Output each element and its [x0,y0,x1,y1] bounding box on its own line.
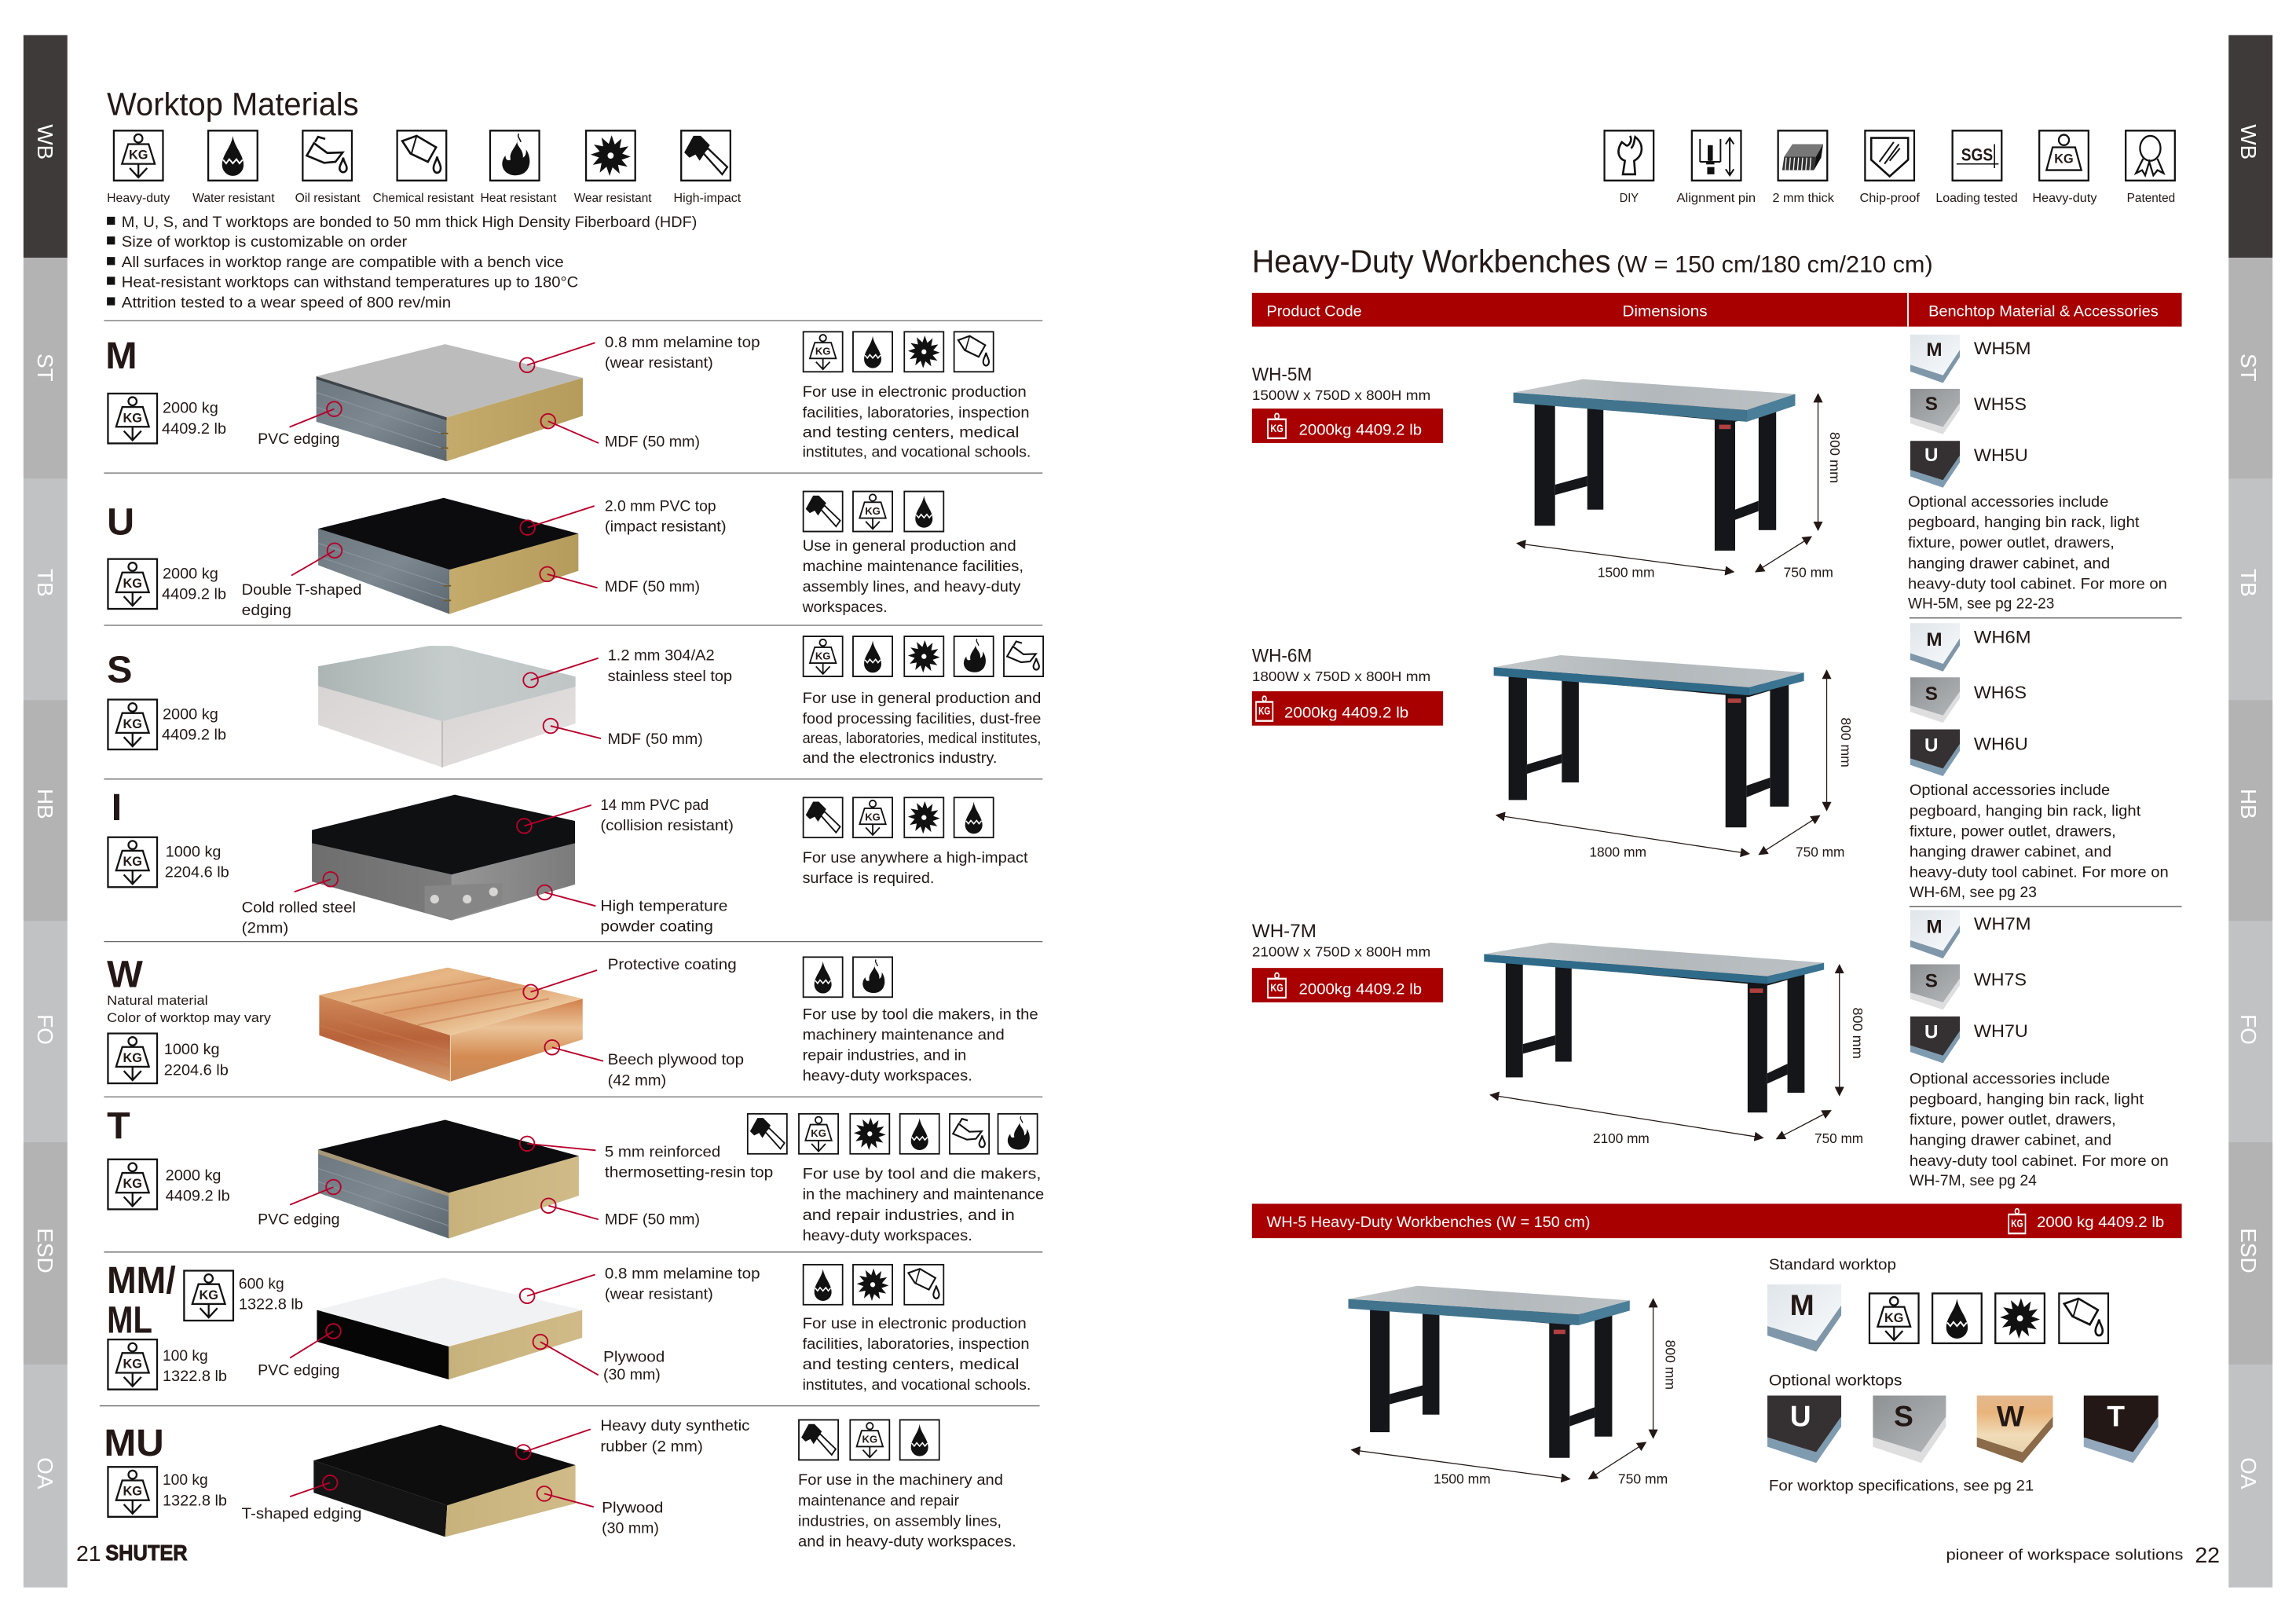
footer: left page: SHUTER [105,1541,188,1565]
title: Worktop Materials: Worktop Materials [107,86,359,122]
legend: worktop property icons: Heat resistant [480,192,557,205]
optional worktops: U [1790,1400,1811,1433]
bench drawing: 2100 mm: 750 mm [1814,1130,1863,1146]
panel: S worktop [107,636,1043,768]
feature icons row [1605,130,2175,205]
worktop options: U [1924,735,1939,756]
load rating: M: 2000 kg [163,400,218,417]
heading: MM/ML [107,1259,176,1341]
description: machinery maintenance and [803,1027,1005,1044]
labels: 2.0 mm PVC top [605,498,716,515]
feature icons row: Chip-proof [1859,192,1921,205]
accessories note [1910,1070,2169,1189]
feature icons row: Alignment pin [1676,192,1756,205]
panel: MU worktop [104,1417,1016,1551]
labels: 1.2 mm 304/A2 [608,647,715,665]
labels: T-shaped edging [242,1505,361,1522]
footer: right page: pioneer of workspace solutions [1946,1546,2184,1563]
feature icons row: Heavy-duty [2032,192,2097,205]
labels: Cold rolled steel [242,899,356,916]
worktop options: WH7U [1974,1021,2028,1041]
description: institutes, and vocational schools. [803,444,1031,461]
bullet list: worktop notes: All surfaces in worktop range are compatible with a bench vice [122,254,564,271]
optional worktops: W [1997,1400,2025,1433]
description: For use in electronic production [803,1315,1027,1332]
section tabs: left: ST [33,354,57,382]
optional worktops: T [2107,1400,2125,1433]
load rating: W [108,1034,229,1083]
callouts [290,1429,594,1507]
optional worktops: Optional worktops [1769,1372,1902,1389]
footer: left page [76,1541,188,1566]
accessories note: hanging drawer cabinet, and [1910,1132,2111,1149]
load rating: M: 4409.2 lb [162,420,226,438]
description: surface is required. [803,870,934,887]
worktop block: PVC pad on steel [312,795,575,921]
accessories note: fixture, power outlet, drawers, [1910,822,2116,840]
labels: edging [242,602,291,619]
description [803,1166,1044,1244]
accessories note: heavy-duty tool cabinet. For more on [1910,864,2169,881]
labels: MDF (50 mm) [605,578,700,595]
heading: MM/ML: ML [107,1299,152,1341]
bullet list: worktop notes [107,214,697,311]
footer: left page: 21 [76,1541,101,1566]
worktop block: white melamine [317,1277,582,1379]
red title bar: WH-5 Heavy-Duty Workbenches (W = 150 cm) [1266,1214,1590,1231]
feature icons row: DIY [1620,192,1639,205]
bench drawing: 1500 mm: 750 mm [1784,564,1833,580]
property icons [799,1420,939,1460]
description: institutes, and vocational schools. [803,1376,1031,1394]
load badge [1252,968,1443,1002]
heading: MM/ML: MM/ [107,1259,176,1302]
description: and the electronics industry. [803,749,997,767]
table header: Benchtop Material & Accessories [1928,303,2159,321]
product code and dimensions: 2100W x 750D x 800H mm [1252,943,1430,959]
accessories note: fixture, power outlet, drawers, [1908,534,2115,551]
labels: stainless steel top [608,668,732,685]
accessories note: Optional accessories include [1910,1070,2110,1087]
panel: W worktop [107,953,1038,1089]
callouts [291,506,598,588]
section tabs: left: OA [33,1457,57,1489]
worktop block: beech wood [319,968,583,1082]
load rating: W: 1000 kg [164,1041,220,1058]
panel: T worktop [107,1105,1044,1244]
bench drawing: 1800 mm: 750 mm [1796,844,1844,860]
description: maintenance and repair [798,1492,960,1509]
product code and dimensions: WH-6M [1252,646,1312,667]
worktop options: S [1925,394,1938,415]
description: For use in electronic production [803,383,1027,401]
worktop block: synthetic rubber [313,1425,576,1537]
section tabs: right: HB [2236,789,2261,819]
heading: I: I [112,786,122,829]
description: and testing centers, medical [803,423,1019,441]
labels [608,956,744,1089]
description [803,1315,1031,1394]
standard worktop: Standard worktop [1769,1256,1896,1273]
optional worktops: For worktop specifications, see pg 21 [1769,1478,2034,1495]
title: Heavy-Duty Workbenches: Heavy-Duty Workbenches [1252,244,1611,280]
bench drawing: 2100 mm: 2100 mm [1593,1130,1650,1146]
labels: 14 mm PVC pad [600,797,709,814]
description [803,690,1042,767]
description: assembly lines, and heavy-duty [803,578,1021,595]
accessories note: pegboard, hanging bin rack, light [1908,514,2140,531]
load rating: U: 4409.2 lb [162,585,226,603]
heading: S: S [107,649,132,691]
labels: Beech plywood top [608,1051,744,1068]
worktop options: WH5S [1974,394,2027,414]
worktop options: WH7S [1974,970,2027,990]
worktop options: S [1925,970,1938,991]
labels: thermosetting-resin top [605,1164,773,1182]
accessories note: pegboard, hanging bin rack, light [1910,802,2141,819]
standard worktop: M [1790,1288,1814,1321]
load rating: MM: 1322.8 lb [239,1296,303,1313]
description: Use in general production and [803,537,1016,555]
description: repair industries, and in [803,1047,966,1064]
section tabs: right: ST [2236,354,2261,382]
worktop options: WH5M [1974,339,2031,358]
description: For use anywhere a high-impact [803,849,1028,866]
callouts [290,343,599,443]
load badge [1252,691,1443,726]
description: workspaces. [802,599,888,616]
load rating: S [108,700,226,749]
load rating: MU: 1322.8 lb [163,1492,227,1509]
accessories note: fixture, power outlet, drawers, [1910,1112,2116,1129]
worktop options: U [1924,445,1939,466]
load rating: M [108,394,226,443]
callouts [290,1275,599,1375]
note: natural material: Natural material [107,993,208,1008]
section tabs: left [24,35,68,1588]
load rating: MM [184,1271,303,1321]
description: For use in general production and [803,690,1041,707]
note: natural material: Color of worktop may vary [107,1010,272,1025]
accessories note: WH-5M, see pg 22-23 [1908,595,2055,613]
red title bar: 2000 kg 4409.2 lb [2037,1214,2164,1231]
bench drawing: 2100 mm [1484,943,1866,1146]
table header: Dimensions [1622,303,1708,321]
property icons [804,492,943,532]
title: Heavy-Duty Workbenches [1252,244,1933,280]
load badge [1252,408,1443,443]
labels [258,1265,760,1383]
property icons [804,636,1043,676]
labels: Plywood [602,1500,663,1517]
load rating: U: 2000 kg [163,565,218,582]
description: in the machinery and maintenance [803,1186,1044,1204]
section tabs: right [2228,35,2272,1588]
load rating: W: 2204.6 lb [164,1061,229,1079]
load badge: 2000kg 4409.2 lb [1299,422,1422,439]
labels: 0.8 mm melamine top [605,1265,760,1282]
labels: powder coating [600,918,713,936]
labels: (42 mm) [608,1072,666,1089]
load rating: T: 2000 kg [166,1167,222,1184]
load rating: S: 2000 kg [163,705,218,723]
feature icons row: Loading tested [1935,192,2018,205]
legend: worktop property icons: Heavy-duty [107,192,170,205]
panel: WH-5M [1252,335,2167,613]
labels: rubber (2 mm) [600,1438,703,1455]
accessories note: hanging drawer cabinet, and [1908,555,2110,572]
load rating: MU [108,1467,227,1517]
load rating: ML [108,1339,227,1390]
labels [258,334,760,451]
accessories note: hanging drawer cabinet, and [1910,844,2111,861]
worktop options: WH6M [1974,627,2031,647]
title: Heavy-Duty Workbenches: (W = 150 cm/180 cm/210 cm) [1617,252,1933,278]
description: industries, on assembly lines, [798,1512,1002,1530]
labels: PVC edging [258,1211,340,1228]
description [803,1006,1038,1085]
legend: worktop property icons: Oil resistant [295,192,361,205]
description: facilities, laboratories, inspection [803,1335,1030,1353]
product code and dimensions: WH-5M [1252,365,1312,386]
description: heavy-duty workspaces. [803,1227,972,1244]
legend: worktop property icons: High-impact [674,192,742,205]
load rating: T: 4409.2 lb [166,1188,230,1205]
panel: MM/ML worktop [107,1259,1031,1394]
bench drawing: 2100 mm: 800 mm [1850,1008,1866,1059]
description: food processing facilities, dust-free [803,710,1042,727]
panel: WH-5 heavy-duty workbenches [1252,1204,2182,1495]
labels [258,1144,773,1228]
description: and repair industries, and in [803,1207,1015,1224]
bench drawing: 1500 mm: 750 mm [1618,1471,1668,1486]
worktop options: WH6S [1974,683,2027,702]
description: and in heavy-duty workspaces. [798,1533,1016,1551]
worktop block: stainless steel [318,646,576,768]
section tabs: right: FO [2236,1014,2261,1045]
worktop options: WH6U [1974,734,2028,753]
panel: U worktop [107,492,1023,619]
footer: right page: 22 [2195,1543,2220,1567]
load rating: ML: 100 kg [163,1347,208,1365]
section tabs: left: HB [33,789,57,819]
labels: Protective coating [608,956,737,973]
section tabs: left: FO [33,1014,57,1045]
bench drawing: 1500 mm: 800 mm [1662,1340,1678,1390]
callouts [290,1137,599,1219]
description: For use by tool die makers, in the [803,1006,1038,1023]
worktop options: M [1926,916,1943,937]
load rating: I: 1000 kg [166,844,222,861]
callouts [523,658,601,738]
description: machine maintenance facilities, [803,558,1023,575]
heading: M: M [105,335,137,377]
accessories note: heavy-duty tool cabinet. For more on [1908,575,2167,592]
accessories note: Optional accessories include [1908,493,2108,511]
property icons [748,1114,1038,1154]
labels: MDF (50 mm) [608,731,703,748]
legend: worktop property icons: Chemical resistant [372,192,474,205]
load rating: S: 4409.2 lb [162,726,226,743]
standard worktop [1767,1256,2108,1352]
heading: U: U [107,500,134,543]
labels: (2mm) [242,919,288,936]
description: For use in the machinery and [798,1471,1003,1489]
description: For use by tool and die makers, [803,1166,1041,1183]
labels: (30 mm) [603,1366,661,1383]
worktop options: WH7M [1974,914,2031,934]
panel: I worktop [108,786,1028,936]
bullet list: worktop notes: M, U, S, and T worktops are bonded to 50 mm thick High Density Fiberboard (HDF) [122,214,697,231]
heading: W: W [107,953,143,995]
table header: Product Code [1266,303,1362,321]
section tabs: right: WB [2236,124,2261,159]
bench drawing: 1500 mm: 800 mm [1827,432,1843,483]
section tabs: right: OA [2236,1457,2261,1489]
section tabs: right: ESD [2236,1228,2261,1273]
worktop block: PVC [318,498,578,614]
worktop options [1910,335,2031,488]
panel: WH-6M [1252,623,2169,901]
callouts [295,805,595,906]
bench drawing: 1800 mm: 1800 mm [1589,844,1646,860]
property icons [804,1265,943,1305]
description: areas, laboratories, medical institutes, [803,730,1041,747]
accessories note [1910,782,2169,901]
optional worktops: S [1894,1400,1913,1433]
property icons [804,957,892,997]
description: heavy-duty workspaces. [803,1068,972,1085]
description: facilities, laboratories, inspection [803,404,1030,421]
section tabs: left: TB [33,569,57,597]
legend: worktop property icons: Water resistant [192,192,275,205]
labels: (impact resistant) [605,518,727,536]
load rating: U [108,559,226,609]
callouts [523,970,603,1061]
labels: Heavy duty synthetic [600,1417,750,1434]
load rating: T [108,1160,230,1209]
footer: right page [1946,1543,2220,1567]
worktop options: M [1926,339,1943,361]
feature icons row: 2 mm thick [1773,192,1834,205]
labels: 5 mm reinforced [605,1144,720,1161]
product code and dimensions: 1500W x 750D x 800H mm [1252,387,1430,403]
accessories note: WH-7M, see pg 24 [1910,1172,2037,1189]
worktop block: melamine [317,344,583,461]
product code and dimensions [1252,646,1430,684]
load badge: 2000kg 4409.2 lb [1284,704,1408,721]
panel: WH-7M [1252,910,2169,1189]
labels: Double T-shaped [242,581,361,599]
product code and dimensions [1252,921,1430,959]
bench drawing: 1500 mm: 1500 mm [1434,1471,1491,1486]
labels [242,498,727,619]
panel: M worktop [105,332,1031,461]
property icons [804,332,994,372]
worktop options: WH5U [1974,445,2028,465]
bullet list: worktop notes: Size of worktop is customizable on order [122,233,408,251]
labels: PVC edging [258,1361,340,1379]
labels: (wear resistant) [605,354,713,372]
description [798,1471,1016,1551]
product code and dimensions: 1800W x 750D x 800H mm [1252,669,1430,684]
accessories note: pegboard, hanging bin rack, light [1910,1091,2144,1108]
load rating: I [108,837,229,887]
labels: (30 mm) [602,1520,659,1537]
heading: T: T [107,1105,130,1147]
load badge: 2000kg 4409.2 lb [1299,981,1422,998]
property icons [804,797,994,837]
labels: Plywood [603,1349,665,1366]
worktop options: S [1925,683,1938,705]
bullet list: worktop notes: Heat-resistant worktops can withstand temperatures up to 180°C [122,273,578,291]
accessories note [1908,493,2167,613]
table header [1252,293,2182,327]
labels: High temperature [600,897,728,914]
worktop options [1910,623,2031,776]
load rating: MU: 100 kg [163,1471,208,1489]
labels: (wear resistant) [605,1285,713,1302]
bench drawing: 1800 mm [1494,655,1854,860]
red title bar [1252,1204,2182,1238]
description [803,383,1031,461]
section tabs: left: WB [33,124,57,159]
labels: 0.8 mm melamine top [605,334,760,351]
heading: MU: MU [104,1422,164,1464]
labels: MDF (50 mm) [605,1211,700,1228]
product code and dimensions [1252,365,1430,403]
labels [242,1417,750,1537]
bench drawing: 1800 mm: 800 mm [1838,717,1854,768]
accessories note: Optional accessories include [1910,782,2110,799]
labels [608,647,732,748]
labels: PVC edging [258,430,340,448]
description [803,849,1028,887]
load rating: I: 2204.6 lb [165,864,229,881]
load rating: ML: 1322.8 lb [163,1368,227,1385]
description [802,537,1023,616]
worktop options: M [1926,629,1943,650]
feature icons row: Patented [2127,192,2175,205]
labels [242,797,734,936]
worktop options [1910,910,2031,1063]
bullet list: worktop notes: Attrition tested to a wear speed of 800 rev/min [122,294,451,311]
product code and dimensions: WH-7M [1252,921,1316,942]
legend: worktop property icons: Wear resistant [574,192,652,205]
accessories note: heavy-duty tool cabinet. For more on [1910,1152,2169,1170]
note: natural material [107,993,272,1025]
labels: MDF (50 mm) [605,434,700,451]
worktop options: U [1924,1022,1939,1043]
section tabs: left: ESD [33,1228,57,1273]
load rating: MM: 600 kg [239,1275,284,1292]
accessories note: WH-6M, see pg 23 [1910,884,2037,901]
legend: worktop property icons [107,130,742,205]
worktop block: thermosetting resin [318,1119,579,1238]
bench drawing: 1500 mm [1514,379,1843,580]
description: and testing centers, medical [803,1356,1019,1373]
labels: (collision resistant) [600,817,734,834]
section tabs: right: TB [2236,569,2261,597]
bench drawing: 1500 mm: 1500 mm [1598,564,1654,580]
optional worktops [1767,1372,2159,1495]
bench drawing: 1500 mm [1349,1286,1678,1486]
